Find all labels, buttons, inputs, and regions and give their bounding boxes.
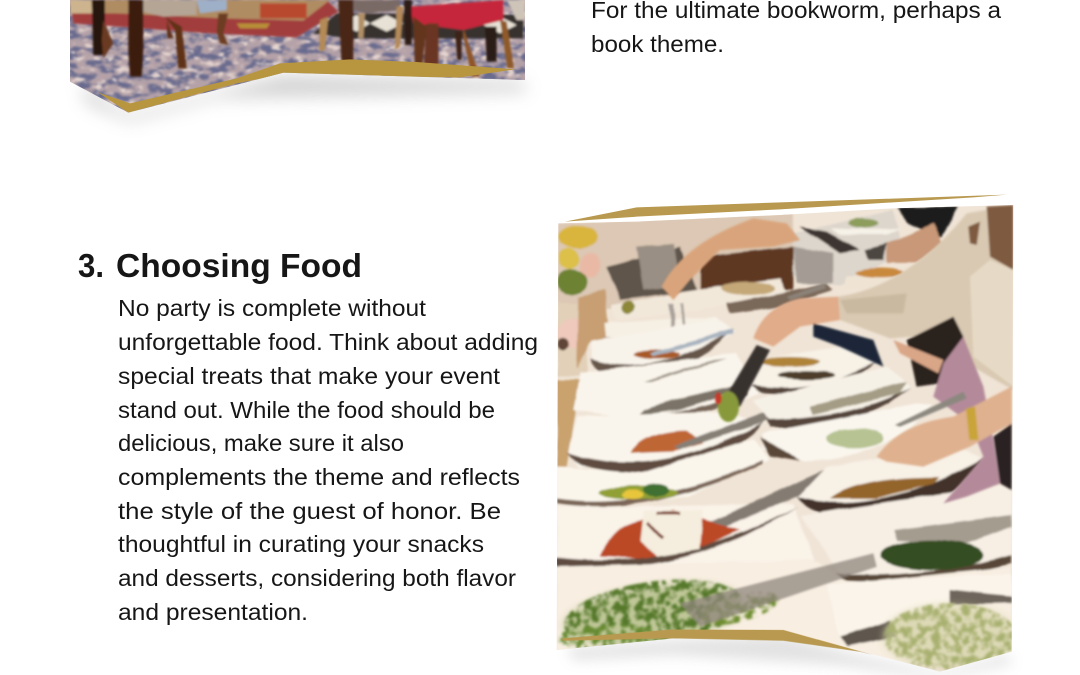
text block: choosing food body: thoughtful in curating your snacks (118, 531, 484, 557)
panel: dining room photo (67, 0, 530, 122)
heading: 3. Choosing Food: 3. (78, 247, 104, 284)
far arm (662, 218, 800, 300)
front forearm (877, 387, 1012, 467)
plate J (802, 483, 1012, 577)
text block: choosing food body (118, 295, 538, 625)
plate A (590, 322, 730, 366)
plate D (557, 438, 770, 505)
heading: 3. Choosing Food: Choosing Food (116, 247, 362, 284)
flowers (558, 225, 598, 248)
text block: choosing food body: unforgettable food. Think about adding (118, 329, 538, 355)
people: sweater arm (838, 205, 1013, 390)
photo shadow (567, 635, 1013, 675)
plate H (762, 403, 932, 462)
salad base tint (560, 574, 1017, 668)
text block: choosing food body: special treats that make your event (118, 363, 501, 389)
back of room (557, 213, 793, 310)
plate G (753, 367, 912, 425)
hand with tongs (753, 297, 840, 347)
plate F (754, 348, 875, 390)
text block: choosing food body: the style of the guest of honor. Be (118, 498, 501, 524)
text block: choosing food body: and desserts, considering both flavor (118, 565, 516, 591)
text block: choosing food body: complements the theme and reflects (118, 464, 520, 490)
panel: food buffet photo (553, 195, 1020, 675)
top gold accent band (565, 195, 1007, 222)
photo content: carpet and chairs (67, 0, 530, 117)
child in pink (933, 337, 1000, 503)
photo content: buffet table (553, 203, 1020, 675)
wooden table edge (557, 380, 580, 467)
text block: choosing food body: No party is complete without (118, 295, 427, 321)
plate I (796, 450, 982, 505)
intro text continuation (591, 0, 1001, 57)
gold accent band (98, 59, 515, 113)
photo shadow (80, 75, 527, 122)
bottom table plates (557, 560, 1012, 663)
chafing plate rows back (612, 278, 787, 320)
plate C (568, 412, 763, 470)
salad greens (557, 569, 1017, 670)
plate B (573, 353, 760, 418)
text block: choosing food body: delicious, make sure it also (118, 430, 404, 456)
intro text continuation: book theme. (591, 31, 724, 57)
text block: choosing food body: stand out. While the food should be (118, 397, 495, 423)
bottom gold accent band (562, 629, 873, 655)
dark clothes (813, 323, 883, 367)
text block: choosing food body: and presentation. (118, 599, 308, 625)
plate E (557, 503, 815, 567)
